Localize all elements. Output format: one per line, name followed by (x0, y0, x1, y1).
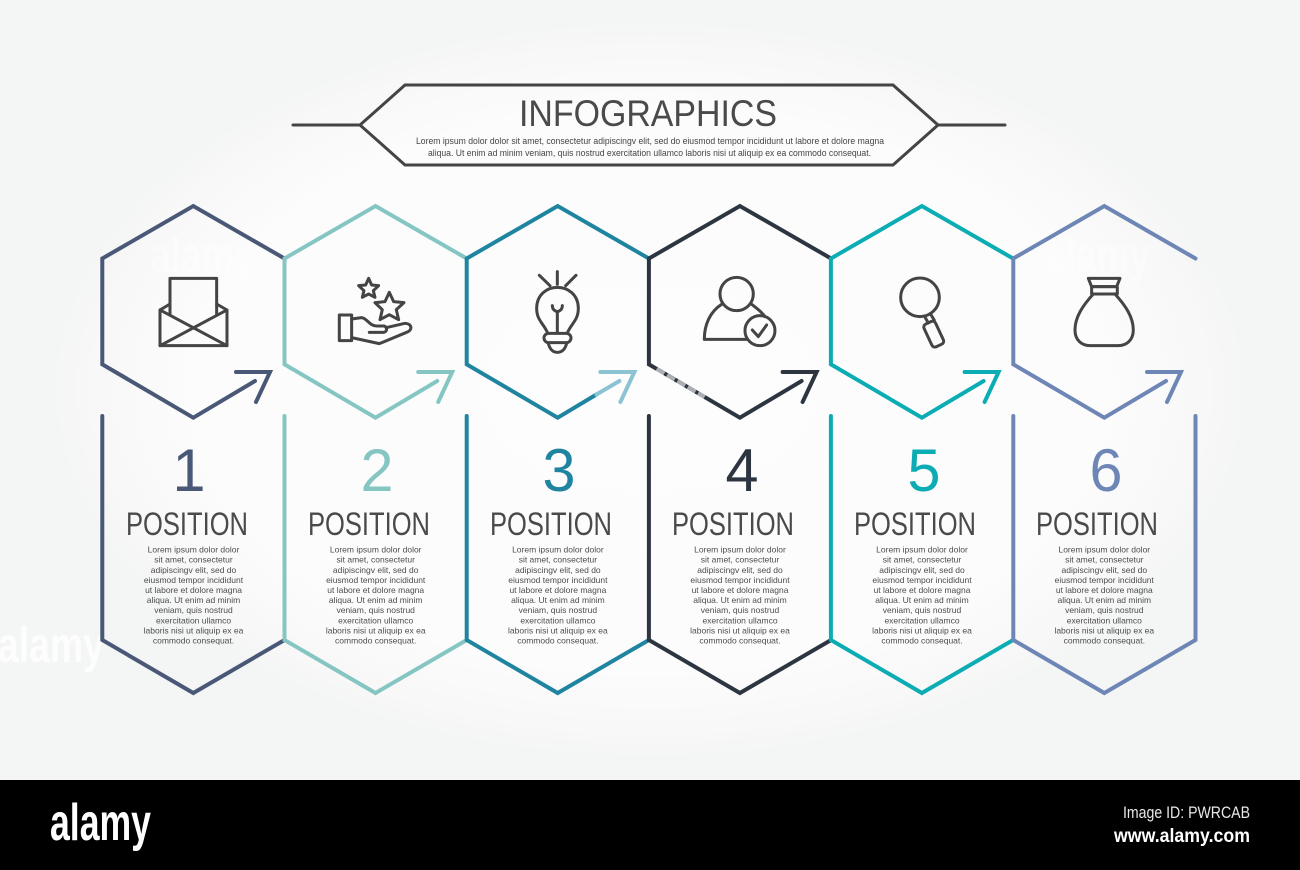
description: Lorem ipsum dolor dolor (148, 545, 239, 555)
number: 2 (360, 437, 394, 504)
hexagon outline with arrow (467, 206, 649, 693)
description: laboris nisi ut aliquip ex ea (326, 625, 426, 635)
header banner (293, 85, 1005, 165)
watermark text: alamy (1045, 227, 1150, 283)
description: ut labore et dolore magna (327, 585, 424, 595)
banner description: aliqua. Ut enim ad minim veniam, quis nostrud exercitation ullamco laboris nisi ut aliquip ex ea commodo consequat. (428, 148, 871, 158)
number: 6 (1090, 437, 1122, 504)
description: aliqua. Ut enim ad minim (693, 595, 787, 605)
description: exercitation ullamco (1067, 615, 1142, 625)
description: adipiscingv elit, sed do (1062, 565, 1147, 575)
description: ut labore et dolore magna (1056, 585, 1153, 595)
description: exercitation ullamco (702, 615, 778, 625)
number: 3 (542, 437, 576, 504)
description: commodo consequat. (699, 636, 781, 646)
description: ut labore et dolore magna (145, 585, 242, 595)
description: ut labore et dolore magna (874, 585, 971, 595)
description: laboris nisi ut aliquip ex ea (1054, 625, 1154, 635)
description: eiusmod tempor incididunt (144, 575, 244, 585)
panel: step 6 (1013, 206, 1196, 693)
icon: magnifying glass (901, 278, 945, 348)
description: veniam, quis nostrud (154, 605, 233, 615)
image id: Image ID: PWRCAB (1123, 803, 1250, 822)
description: exercitation ullamco (338, 615, 414, 625)
description: adipiscingv elit, sed do (515, 565, 601, 575)
description: commodo consequat. (153, 636, 234, 646)
description: veniam, quis nostrud (701, 605, 779, 615)
panel: step 3 (467, 206, 649, 693)
description: veniam, quis nostrud (519, 605, 597, 615)
banner frame (293, 85, 1005, 165)
panel: step 2 (284, 206, 467, 693)
website: www.alamy.com (1113, 826, 1250, 847)
description: aliqua. Ut enim ad minim (511, 595, 605, 605)
description: aliqua. Ut enim ad minim (1058, 595, 1151, 605)
heading: POSITION (490, 506, 612, 542)
description: veniam, quis nostrud (336, 605, 415, 615)
description: laboris nisi ut aliquip ex ea (508, 625, 608, 635)
description: commodo consequat. (881, 636, 963, 646)
number: 1 (172, 437, 206, 504)
hexagon outline with arrow (284, 206, 467, 693)
number: 4 (726, 437, 758, 504)
description: adipiscingv elit, sed do (333, 565, 419, 575)
description: aliqua. Ut enim ad minim (875, 595, 969, 605)
description: sit amet, consectetur (154, 555, 233, 565)
icon: hand with stars (339, 278, 411, 344)
hexagon outline with arrow (649, 206, 831, 693)
description: laboris nisi ut aliquip ex ea (872, 625, 972, 635)
description: sit amet, consectetur (1065, 555, 1144, 565)
heading: POSITION (854, 506, 976, 542)
number: 5 (908, 437, 940, 504)
banner description (416, 136, 884, 158)
description: ut labore et dolore magna (509, 585, 607, 595)
watermark text: alamy (150, 227, 255, 283)
heading: POSITION (126, 506, 248, 542)
description: exercitation ullamco (520, 615, 596, 625)
description: laboris nisi ut aliquip ex ea (144, 625, 244, 635)
description: veniam, quis nostrud (1065, 605, 1144, 615)
description: Lorem ipsum dolor dolor (330, 545, 422, 555)
description: aliqua. Ut enim ad minim (147, 595, 240, 605)
description: Lorem ipsum dolor dolor (876, 545, 968, 555)
description: commodo consequat. (1064, 636, 1145, 646)
footer bar (0, 780, 1300, 870)
description: Lorem ipsum dolor dolor (512, 545, 604, 555)
banner description: Lorem ipsum dolor dolor sit amet, consectetur adipiscingv elit, sed do eiusmod tempor incididunt ut labore et dolore magna (416, 136, 884, 146)
icon: open envelope (160, 278, 227, 346)
description: eiusmod tempor incididunt (690, 575, 790, 585)
description: Lorem ipsum dolor dolor (1058, 545, 1150, 555)
description: exercitation ullamco (156, 615, 231, 625)
heading: POSITION (308, 506, 430, 542)
description: laboris nisi ut aliquip ex ea (690, 625, 790, 635)
description: eiusmod tempor incididunt (326, 575, 426, 585)
description: aliqua. Ut enim ad minim (329, 595, 422, 605)
icon: money sack (1075, 278, 1133, 346)
description: eiusmod tempor incididunt (872, 575, 972, 585)
description: sit amet, consectetur (883, 555, 961, 565)
description: sit amet, consectetur (519, 555, 597, 565)
description: sit amet, consectetur (336, 555, 415, 565)
description: veniam, quis nostrud (883, 605, 961, 615)
description: adipiscingv elit, sed do (697, 565, 783, 575)
description: sit amet, consectetur (701, 555, 779, 565)
footer logo: alamy (50, 794, 151, 852)
description: eiusmod tempor incididunt (1055, 575, 1155, 585)
heading: POSITION (672, 506, 794, 542)
description: Lorem ipsum dolor dolor (694, 545, 786, 555)
watermark text: alamy (0, 617, 104, 673)
description: commodo consequat. (335, 636, 416, 646)
title: INFOGRAPHICS (519, 93, 777, 134)
heading: POSITION (1036, 506, 1158, 542)
panel: step 1 (102, 206, 284, 693)
watermark text (0, 227, 1150, 673)
description: ut labore et dolore magna (692, 585, 789, 595)
description: adipiscingv elit, sed do (879, 565, 965, 575)
hexagon outline with arrow (102, 206, 284, 693)
panel: step 4 (649, 206, 831, 693)
hexagon outline with arrow (1013, 206, 1196, 693)
panel: step 5 (831, 206, 1013, 693)
description: eiusmod tempor incididunt (508, 575, 608, 585)
description: adipiscingv elit, sed do (151, 565, 237, 575)
icon: light bulb (537, 272, 578, 352)
description: commodo consequat. (517, 636, 599, 646)
description: exercitation ullamco (884, 615, 960, 625)
icon: user with check badge (704, 277, 775, 346)
hexagon outline with arrow (831, 206, 1013, 693)
